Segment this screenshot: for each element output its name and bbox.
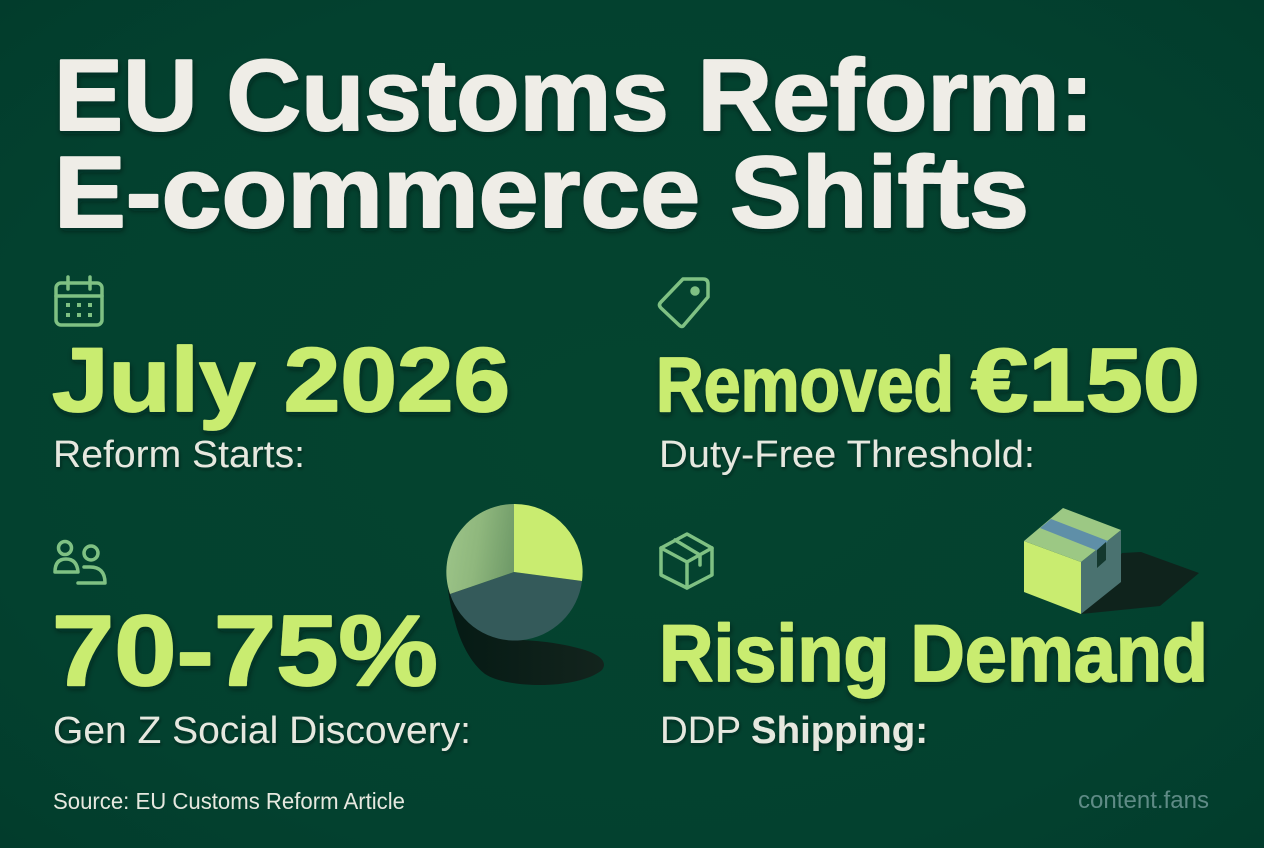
label: Duty-Free Threshold: Duty-Free Threshold: — [659, 434, 1035, 476]
statistic: July 2026: July 2026 — [52, 330, 510, 431]
title: E-commerce Shifts — [54, 137, 1029, 249]
panel: Gen Z social discovery — [52, 504, 604, 752]
brand: content.fans: content.fans — [1078, 787, 1209, 814]
pie slice: dark slate — [450, 572, 582, 641]
label: Reform Starts: Reform Starts: — [53, 434, 305, 476]
panel: reform start date — [52, 277, 510, 476]
label: Gen Z Social Discovery: Gen Z Social Discovery: — [53, 710, 471, 752]
chart: pie with cast shadow — [446, 504, 604, 685]
icon: calendar — [56, 277, 102, 325]
statistic: Removed €150: €150 — [971, 331, 1200, 431]
statistic: Removed €150: Removed — [656, 342, 954, 428]
parcel front face — [1024, 541, 1081, 614]
panel: duty-free threshold — [656, 279, 1200, 476]
pie slice: lime — [514, 504, 583, 581]
label: DDP Shipping: DDP Shipping: — [660, 710, 928, 752]
title — [54, 40, 1094, 249]
parcel top face — [1024, 508, 1121, 562]
source note: Source: EU Customs Reform Article — [53, 788, 405, 814]
panel: DDP shipping — [659, 508, 1208, 752]
icon: box — [661, 534, 712, 588]
parcel cast shadow — [1081, 552, 1199, 614]
parcel tape slot — [1097, 542, 1106, 568]
statistic: 70-75%: 70-75% — [52, 595, 438, 707]
title: EU Customs Reform: — [54, 40, 1094, 152]
statistic: Rising Demand: Rising Demand — [659, 609, 1208, 699]
pie slice: sage green — [446, 504, 514, 594]
icon: price tag — [660, 279, 708, 326]
parcel tape — [1040, 519, 1108, 551]
parcel side face — [1081, 530, 1121, 614]
statistic: Removed €150 — [656, 331, 1200, 431]
icon: people — [55, 542, 105, 583]
illustration: shaded parcel — [1024, 508, 1199, 614]
pie cast shadow — [447, 570, 604, 685]
